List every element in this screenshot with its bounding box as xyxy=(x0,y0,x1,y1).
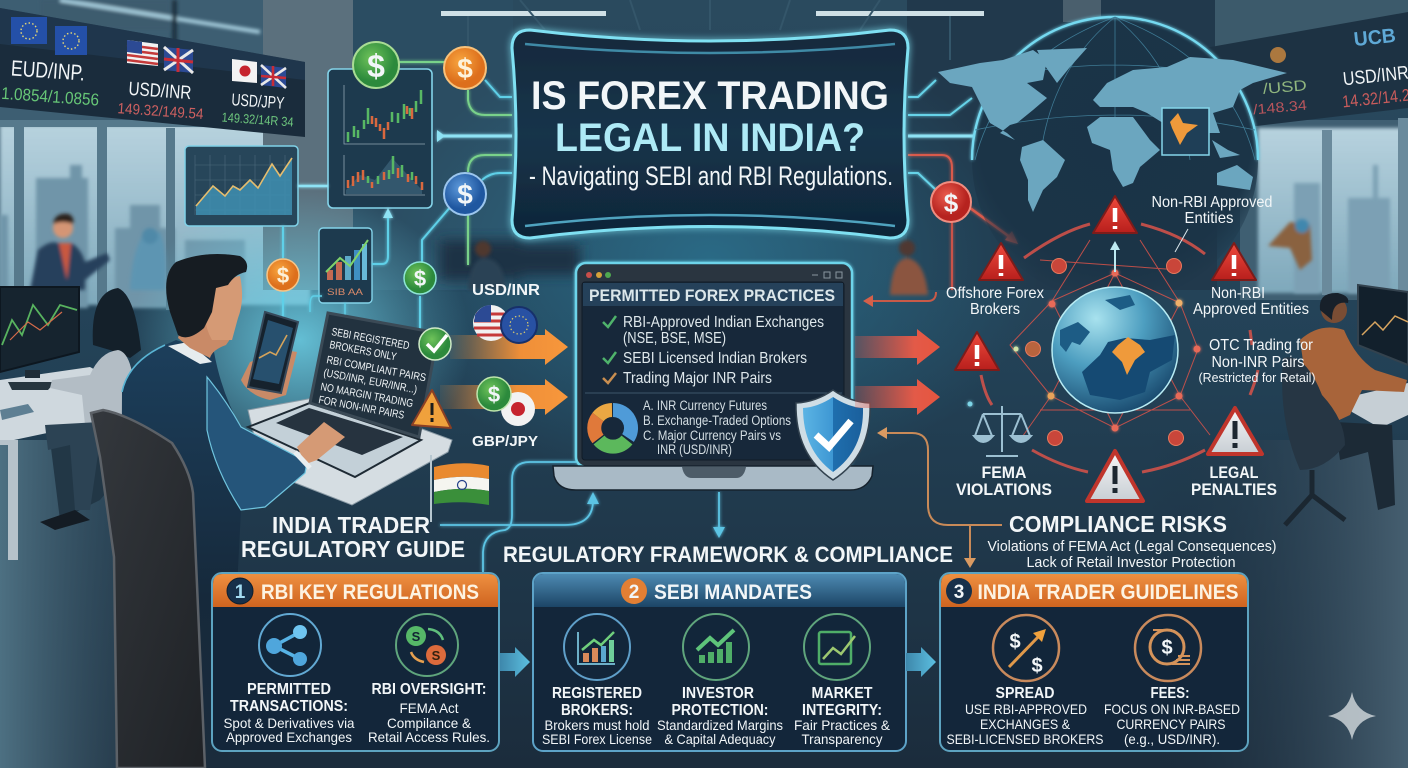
right ticker board: /148.34 xyxy=(1252,97,1308,117)
text: fees xyxy=(1104,685,1240,747)
icon: spread: $ xyxy=(1009,631,1021,653)
text: registered brokers: REGISTERED xyxy=(552,685,642,702)
label: non-RBI approved entities right xyxy=(1193,285,1309,318)
permitted instruments list xyxy=(643,398,791,457)
arrow: orange lower xyxy=(440,379,568,415)
subtitle: - Navigating SEBI and RBI Regulations. xyxy=(529,161,893,191)
title panel xyxy=(512,30,908,238)
permitted instruments list: C. Major Currency Pairs vs xyxy=(643,428,781,443)
chart panel: small bars xyxy=(319,228,372,303)
text: spread: SPREAD xyxy=(996,685,1054,702)
text: registered brokers: SEBI Forex License xyxy=(542,731,652,747)
heading: compliance risks: Violations of FEMA Act (Legal Consequences) xyxy=(988,538,1277,555)
permitted instruments list: INR (USD/INR) xyxy=(657,442,732,457)
laptop screen with checklist: FOR NON-INR PAIRS xyxy=(317,394,405,422)
coin: small green: $ xyxy=(414,266,426,291)
text: investor protection: Standardized Margins xyxy=(657,717,783,733)
permitted checklist xyxy=(603,314,824,387)
label: offshore brokers: Offshore Forex xyxy=(946,285,1044,302)
panel heading: RBI KEY REGULATIONS xyxy=(261,581,479,604)
coin: orange dollar xyxy=(444,47,486,89)
text: market integrity: MARKET xyxy=(812,685,873,702)
flags: US and UK xyxy=(127,40,193,73)
permitted checklist: RBI-Approved Indian Exchanges xyxy=(623,314,824,331)
text: registered brokers xyxy=(542,685,652,747)
body suit xyxy=(120,340,307,768)
text: RBI oversight xyxy=(368,681,490,745)
icon: currency exchange: S xyxy=(432,648,441,663)
chart panel: line chart xyxy=(185,146,298,226)
arrow: panel 1 to 2 xyxy=(500,647,530,677)
permitted checklist: Trading Major INR Pairs xyxy=(623,370,772,387)
office chair xyxy=(91,410,205,768)
monitor xyxy=(1358,285,1408,365)
text: investor protection: PROTECTION: xyxy=(672,702,768,719)
coin: small green xyxy=(404,262,436,294)
India highlight xyxy=(1162,108,1209,155)
text: fees: (e.g., USD/INR). xyxy=(1124,731,1220,747)
desk xyxy=(248,395,452,505)
label: OTC trading xyxy=(1198,337,1316,385)
connector lines right xyxy=(908,80,1018,290)
label: USD/INR pair: USD/INR xyxy=(472,282,540,299)
hand holding phone xyxy=(241,350,297,400)
ticker EUD/INR xyxy=(1,55,102,110)
label: India trader guide: REGULATORY GUIDE xyxy=(241,536,465,562)
text: permitted transactions: TRANSACTIONS: xyxy=(230,698,348,715)
legs xyxy=(1335,422,1395,510)
connector lines to framework xyxy=(440,462,725,572)
icon: justice scales xyxy=(974,406,1031,456)
label: non-RBI approved entities top: Non-RBI Approved xyxy=(1152,194,1272,211)
chart panel: candlesticks xyxy=(328,69,432,208)
coin: blue dollar xyxy=(444,173,486,215)
text: permitted transactions: Spot & Derivatives via xyxy=(224,715,355,731)
text: market integrity xyxy=(794,685,891,747)
badge 1: 1 xyxy=(235,582,246,603)
laptop screen with checklist: (USD/INR, EUR/INR...) xyxy=(322,367,418,396)
label: India trader guide: INDIA TRADER xyxy=(272,512,430,538)
label: offshore brokers: Brokers xyxy=(970,301,1020,318)
text: investor protection xyxy=(657,685,783,747)
text: market integrity: Transparency xyxy=(802,731,882,747)
laptop base xyxy=(248,403,421,477)
coin: blue dollar: $ xyxy=(457,179,473,210)
heading: compliance risks xyxy=(988,511,1277,571)
icon: investor growth xyxy=(683,614,749,680)
text: registered brokers: BROKERS: xyxy=(561,702,633,719)
permitted checklist: (NSE, BSE, MSE) xyxy=(623,330,726,347)
icon: warning triangle xyxy=(412,390,451,428)
icon: share network xyxy=(259,614,321,676)
label: FEMA violations: VIOLATIONS xyxy=(956,480,1052,499)
laptop: permitted forex practices xyxy=(553,263,873,490)
neck and face xyxy=(178,314,233,358)
text: RBI oversight: Compilance & xyxy=(387,715,472,731)
badge 1 xyxy=(227,578,253,604)
phone xyxy=(248,312,298,393)
ticker EUD/INR: 1.0854/1.0856 xyxy=(1,84,100,110)
laptop screen with checklist: RBI COMPLIANT PAIRS xyxy=(325,354,427,384)
text: spread xyxy=(946,685,1104,747)
arrow: red upper xyxy=(855,329,940,365)
ticker USD/JPY: USD/JPY xyxy=(231,90,285,113)
panel heading: SEBI MANDATES xyxy=(654,581,812,604)
laptop screen with checklist xyxy=(310,313,438,437)
ticker EUD/INR: EUD/INP. xyxy=(10,55,86,86)
label: GBP/JPY pair xyxy=(472,377,538,450)
label: USD/INR pair xyxy=(472,282,540,343)
permitted checklist: SEBI Licensed Indian Brokers xyxy=(623,350,807,367)
text: fees: CURRENCY PAIRS xyxy=(1116,716,1226,732)
standing colleague xyxy=(30,214,110,290)
warning: non-RBI xyxy=(1212,243,1256,280)
arrow: red thin return xyxy=(863,292,936,307)
label: OTC trading: (Restricted for Retail) xyxy=(1198,370,1316,385)
warning: top xyxy=(1093,196,1137,233)
arrow: panel 2 to 3 xyxy=(906,647,936,677)
chart panel: small bars: SIB AA xyxy=(327,287,363,297)
right ticker board: UCB xyxy=(1353,25,1397,51)
label: non-RBI approved entities top: Entities xyxy=(1184,210,1234,227)
globe xyxy=(1052,287,1178,413)
text: RBI oversight: FEMA Act xyxy=(400,700,459,716)
laptop base xyxy=(553,466,873,490)
text: RBI oversight: Retail Access Rules. xyxy=(368,729,490,745)
warning: offshore brokers xyxy=(979,243,1023,280)
label: legal penalties xyxy=(1191,463,1277,499)
typing hand xyxy=(297,422,345,464)
panel: RBI key regulations xyxy=(212,573,499,751)
text: spread: EXCHANGES & xyxy=(980,716,1071,732)
ticker USD/INR: USD/INR xyxy=(128,79,192,104)
title line 2: LEGAL IN INDIA? xyxy=(555,116,865,160)
arrow: orange compliance xyxy=(877,427,1002,568)
icon: green check xyxy=(419,328,451,360)
donut chart xyxy=(594,410,631,447)
arrow: orange upper xyxy=(450,329,568,365)
coin: green dollar: $ xyxy=(367,48,385,84)
text: investor protection: INVESTOR xyxy=(682,685,754,702)
panel: India trader guidelines xyxy=(940,573,1248,751)
arrow: red lower xyxy=(855,379,940,415)
text: market integrity: Fair Practices & xyxy=(794,717,891,733)
office chair xyxy=(1282,357,1345,470)
label: non-RBI approved entities top xyxy=(1152,194,1272,227)
laptop screen with checklist: SEBI REGISTERED xyxy=(330,326,410,352)
laptop screen with checklist: BROKERS ONLY xyxy=(328,339,398,363)
label: offshore brokers xyxy=(946,285,1044,318)
right ticker board xyxy=(1205,12,1408,128)
text: RBI oversight: RBI OVERSIGHT: xyxy=(372,681,486,698)
icon: India flag xyxy=(431,455,489,522)
icon: market integrity xyxy=(804,614,870,680)
coin: green dollar xyxy=(353,42,399,88)
badge 3 xyxy=(946,578,972,604)
heading: regulatory framework: REGULATORY FRAMEWORK & COMPLIANCE xyxy=(503,542,953,567)
panel: SEBI mandates xyxy=(533,573,906,751)
coin: red dollar: $ xyxy=(944,188,959,218)
blurred colleague xyxy=(130,228,166,290)
ticker USD/JPY xyxy=(221,90,295,130)
left ticker board xyxy=(0,8,305,137)
risk network xyxy=(968,224,1258,472)
flags: Japan and UK xyxy=(232,59,286,88)
badge 2: 2 xyxy=(629,582,639,603)
heading: compliance risks: COMPLIANCE RISKS xyxy=(1009,511,1227,537)
label: non-RBI approved entities right: Non-RBI xyxy=(1211,285,1265,302)
icon: fees: $ xyxy=(1161,637,1173,659)
icon: shield xyxy=(796,390,870,480)
icon: currency exchange xyxy=(396,614,458,676)
right blurred colleague xyxy=(1268,219,1312,270)
label: FEMA violations: FEMA xyxy=(982,463,1026,482)
text: registered brokers: Brokers must hold xyxy=(544,717,650,733)
right trader xyxy=(1282,285,1408,525)
permitted instruments list: A. INR Currency Futures xyxy=(643,398,767,413)
heading: compliance risks: Lack of Retail Investor Protection xyxy=(1026,554,1236,571)
text: permitted transactions: PERMITTED xyxy=(247,681,331,698)
label: non-RBI approved entities right: Approved Entities xyxy=(1193,301,1309,318)
icon: spread: $ xyxy=(1031,655,1043,677)
text: permitted transactions: Approved Exchanges xyxy=(226,729,352,745)
icon: fees xyxy=(1135,615,1201,681)
text: fees: FEES: xyxy=(1150,685,1190,702)
permitted instruments list: B. Exchange-Traded Options xyxy=(643,413,791,428)
text: investor protection: & Capital Adequacy xyxy=(664,731,776,747)
label: legal penalties: LEGAL xyxy=(1210,463,1258,482)
hair xyxy=(166,254,247,337)
badge 2 xyxy=(621,578,647,604)
icon: broker chart xyxy=(564,614,630,680)
ticker USD/JPY: 149.32/14R 34 xyxy=(221,110,294,130)
icon: currency exchange: S xyxy=(412,629,421,644)
continents xyxy=(938,48,1287,212)
suit arm xyxy=(207,377,307,510)
head xyxy=(1321,297,1347,323)
coin: small orange: $ xyxy=(277,263,289,288)
label: India trader guide xyxy=(241,512,465,562)
trader at laptop xyxy=(91,254,452,768)
text: spread: USE RBI-APPROVED xyxy=(965,701,1087,717)
coin: small orange xyxy=(267,259,299,291)
label: legal penalties: PENALTIES xyxy=(1191,480,1277,499)
left desk and woman xyxy=(0,287,165,560)
text: fees: FOCUS ON INR-BASED xyxy=(1104,701,1240,717)
text: spread: SEBI-LICENSED BROKERS xyxy=(946,731,1104,747)
torso and arm xyxy=(1300,328,1407,422)
warning: left xyxy=(955,332,999,370)
world map hologram xyxy=(938,17,1287,303)
label: GBP/JPY pair: $ xyxy=(488,382,500,407)
heading: permitted practices: PERMITTED FOREX PRACTICES xyxy=(589,286,835,305)
label: OTC trading: OTC Trading for xyxy=(1209,337,1314,354)
panel heading: INDIA TRADER GUIDELINES xyxy=(978,581,1238,604)
text: market integrity: INTEGRITY: xyxy=(802,702,882,719)
coin: orange dollar: $ xyxy=(457,53,473,84)
icon: sparkle watermark xyxy=(1328,692,1376,740)
warning: legal penalties xyxy=(1208,408,1262,454)
connector lines left xyxy=(283,62,512,330)
label: GBP/JPY pair: GBP/JPY xyxy=(472,433,538,450)
coin: red dollar xyxy=(931,182,971,222)
desk xyxy=(1345,383,1408,428)
ticker USD/INR xyxy=(117,78,206,123)
badge 3: 3 xyxy=(954,582,964,603)
warning: bottom center xyxy=(1087,451,1143,501)
right ticker board: /USD xyxy=(1262,77,1308,98)
flags: EU xyxy=(11,17,87,55)
text: permitted transactions xyxy=(224,681,355,745)
label: FEMA violations xyxy=(956,463,1052,499)
ticker USD/INR: 149.32/149.54 xyxy=(117,100,204,123)
laptop screen with checklist: NO MARGIN TRADING xyxy=(319,381,414,410)
icon: spread xyxy=(993,615,1059,681)
label: OTC trading: Non-INR Pairs xyxy=(1212,354,1304,371)
title line 1: IS FOREX TRADING xyxy=(531,74,889,118)
